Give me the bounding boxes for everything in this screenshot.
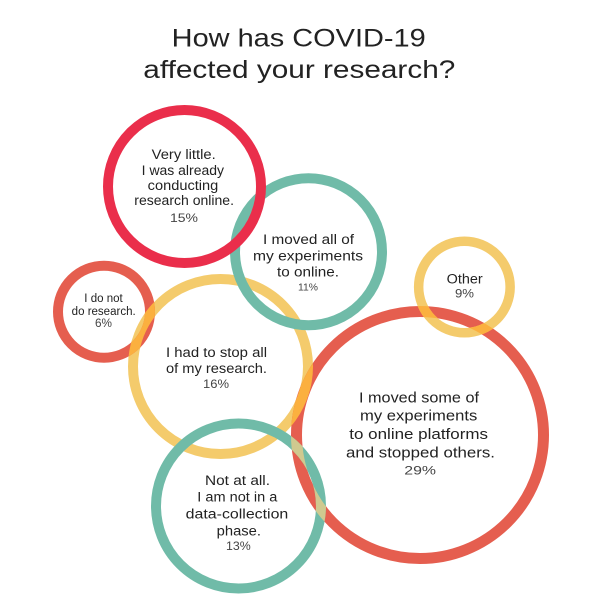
panel: moved all experiments online 11%: my experiments	[253, 248, 363, 264]
panel: very little, already online 15%: Very little.	[152, 147, 216, 162]
panel: moved some, stopped others 29%: and stopped others.	[346, 445, 495, 461]
panel: moved some, stopped others 29%: to online platforms	[349, 427, 488, 443]
panel: do not do research 6%: do research.	[72, 306, 136, 318]
panel: not at all, no data collection 13%: I am not in a	[197, 490, 278, 505]
panel: had to stop all research 16%	[133, 279, 308, 454]
panel: had to stop all research 16%: of my research.	[166, 361, 267, 376]
panel: do not do research 6%: I do not	[84, 293, 123, 305]
panel: very little, already online 15%	[108, 110, 261, 263]
panel: moved all experiments online 11%: I moved all of	[263, 232, 354, 247]
panel: not at all, no data collection 13%: 13%	[226, 539, 251, 553]
panel: other 9%: Other	[447, 271, 483, 286]
panel: moved all experiments online 11%: to online.	[277, 265, 339, 280]
panel: moved some, stopped others 29%: I moved some of	[359, 390, 480, 406]
panel: not at all, no data collection 13%: data-collection	[186, 506, 288, 521]
title	[143, 25, 455, 84]
panel: very little, already online 15%: 15%	[170, 211, 198, 225]
panel: not at all, no data collection 13%: phase.	[217, 523, 261, 538]
panel: other 9%	[419, 241, 510, 333]
ring overlaps	[128, 302, 493, 522]
panel: moved some, stopped others 29%	[296, 312, 544, 558]
title: How has COVID-19	[172, 25, 426, 53]
panel: do not do research 6%	[58, 266, 150, 358]
panel: moved some, stopped others 29%: my experiments	[360, 409, 477, 425]
panel: moved all experiments online 11%	[235, 178, 382, 325]
panel: other 9%: 9%	[455, 287, 474, 301]
panel: do not do research 6%: 6%	[95, 318, 112, 330]
panel: very little, already online 15%: research online.	[134, 193, 234, 208]
panel: moved some, stopped others 29%: 29%	[404, 463, 436, 477]
panel: had to stop all research 16%: 16%	[203, 377, 229, 391]
panel: very little, already online 15%: conducting	[148, 178, 218, 193]
panel: moved all experiments online 11%: 11%	[298, 282, 318, 294]
panel: very little, already online 15%: I was already	[142, 163, 224, 178]
panel: had to stop all research 16%: I had to stop all	[166, 345, 267, 360]
panel: not at all, no data collection 13%: Not at all.	[205, 473, 270, 488]
title: affected your research?	[143, 56, 455, 84]
panel: not at all, no data collection 13%	[156, 424, 321, 588]
